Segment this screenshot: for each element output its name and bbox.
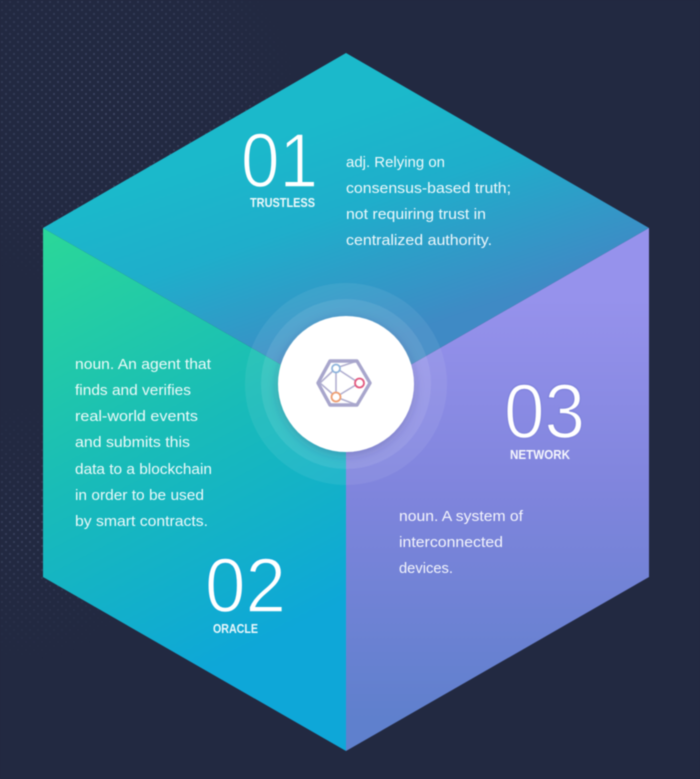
text: trustless definition: not requiring trust in bbox=[346, 206, 486, 223]
text: oracle definition: noun. An agent that bbox=[75, 356, 212, 373]
text: oracle definition: and submits this bbox=[75, 434, 190, 451]
text: trustless definition: consensus-based truth; bbox=[346, 180, 511, 197]
center badge bbox=[245, 283, 447, 485]
number 03: 03 bbox=[504, 369, 585, 455]
text: oracle definition: data to a blockchain bbox=[75, 461, 212, 478]
text: trustless definition: centralized authority. bbox=[346, 232, 492, 249]
text: trustless definition bbox=[346, 154, 511, 249]
text: network definition: devices. bbox=[399, 560, 453, 577]
panel: 01 trustless bbox=[43, 53, 649, 402]
panel: 03 network bbox=[346, 228, 649, 751]
text: network definition: noun. A system of bbox=[399, 508, 524, 525]
icon: network hexagon logo bbox=[318, 361, 370, 405]
text: trustless definition: adj. Relying on bbox=[346, 154, 445, 171]
text: oracle definition: in order to be used bbox=[75, 487, 204, 504]
number 01: 01 bbox=[241, 118, 318, 204]
heading: network: NETWORK bbox=[510, 448, 570, 462]
number 02: 02 bbox=[205, 543, 286, 629]
text: network definition: interconnected bbox=[399, 534, 503, 551]
text: oracle definition: by smart contracts. bbox=[75, 513, 208, 530]
text: oracle definition: finds and verifies bbox=[75, 382, 191, 399]
text: oracle definition: real-world events bbox=[75, 408, 198, 425]
text: network definition bbox=[399, 508, 524, 577]
heading: trustless: TRUSTLESS bbox=[250, 196, 315, 210]
panel: 02 oracle bbox=[43, 228, 346, 751]
text: oracle definition bbox=[75, 356, 212, 530]
heading: oracle: ORACLE bbox=[213, 622, 258, 636]
